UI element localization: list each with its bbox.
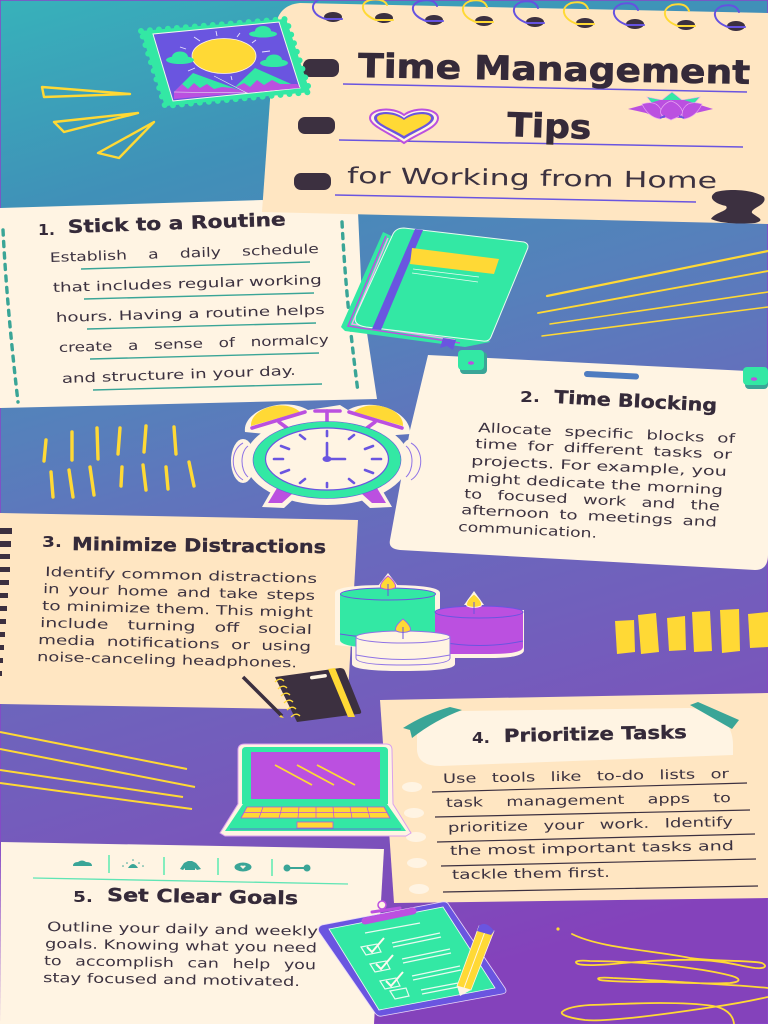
title: Tips: [507, 105, 592, 147]
icon: candles: [335, 573, 524, 671]
icon: black spiral notebook: [275, 668, 361, 722]
icon: shirt: [180, 861, 201, 870]
text: tip 1 body: [50, 242, 329, 387]
decoration: yellow triangle bursts: [42, 87, 154, 158]
icon row: [73, 855, 310, 876]
text: tip 4 body: task management apps to: [446, 791, 731, 811]
text: tip 4 body: prioritize your work. Identify: [448, 815, 733, 836]
washi tape: [403, 702, 739, 738]
icon: lotus flower: [628, 92, 713, 120]
icon: pencil: [243, 677, 284, 718]
text: tip 3 body: [37, 565, 318, 671]
text: tip 2 body: [458, 421, 736, 542]
heading: tip 5: Set Clear Goals: [107, 885, 298, 909]
panel: tip 5 set clear goals: [0, 842, 384, 1024]
icon: cloud: [73, 860, 92, 866]
heading: tip 2: Time Blocking: [554, 387, 718, 417]
text: tip 1 body: Establish a daily schedule: [50, 242, 319, 266]
icon: alarm clock: [231, 404, 423, 508]
text: tip 5 body: goals. Knowing what you need: [45, 937, 317, 956]
text: tip 2 body: to focused work and the: [464, 487, 720, 515]
icon: sun postage stamp: [141, 19, 310, 106]
icon: sunrise: [128, 864, 138, 868]
text: tip 5 body: stay focused and motivated.: [43, 971, 300, 990]
pencil on clipboard: [457, 924, 494, 996]
bullets: [294, 59, 339, 190]
binding rings: [313, 0, 745, 31]
purple candle: [435, 594, 523, 654]
text: tip 4 body: the most important tasks and: [450, 839, 734, 859]
heading: tip 1: [38, 209, 286, 239]
text: tip 5 body: to accomplish can help you: [44, 954, 316, 973]
title: Time Management: [358, 46, 751, 92]
panel: tip 3 minimize distractions: [0, 513, 358, 710]
heading card: [417, 708, 733, 766]
text: tip 2 body: might dedicate the morning: [467, 471, 723, 499]
title: [347, 46, 751, 194]
text: tip 4 body: Use tools like to-do lists or: [443, 767, 730, 787]
heading: tip 3: 3.: [42, 533, 62, 551]
panel: tip 2 time blocking: [390, 350, 768, 570]
text: tip 3 body: to minimize them. This might: [42, 599, 313, 621]
heading: tip 1: 1.: [38, 221, 55, 239]
heading: tip 2: 2.: [520, 388, 540, 406]
text: tip 5 body: [43, 920, 319, 990]
text: tip 2 body: Allocate specific blocks of: [478, 421, 736, 447]
decoration: yellow squiggle: [562, 934, 768, 1024]
heading: tip 4: 4.: [472, 729, 490, 747]
spiral binding: [0, 528, 12, 676]
text: tip 2 body: projects. For example, you: [471, 454, 727, 480]
decoration: yellow paint blocks: [615, 609, 768, 654]
panel: tip 4 prioritize tasks: [380, 693, 768, 903]
text: tip 3 body: Identify common distractions: [45, 565, 318, 587]
text: tip 4 body: tackle them first.: [452, 866, 610, 883]
text: tip 5 body: Outline your daily and weekly: [47, 920, 319, 940]
text: tip 1 body: hours. Having a routine helps: [56, 303, 325, 326]
corner ink blob: [711, 190, 765, 224]
heading: tip 5: 5.: [73, 888, 93, 906]
white candle: [356, 619, 450, 665]
icon: heart: [370, 110, 438, 143]
text: tip 2 body: communication.: [458, 520, 597, 542]
heading: tip 3: Minimize Distractions: [72, 534, 326, 558]
holes: [402, 782, 429, 894]
text: tip 1 body: that includes regular working: [53, 273, 322, 296]
candle halos: [335, 573, 524, 671]
text: tip 3 body: include turning off social: [40, 616, 312, 638]
text: tip 1 body: and structure in your day.: [62, 364, 296, 387]
heading: tip 4: Prioritize Tasks: [504, 722, 687, 747]
text: tip 2 body: time for different tasks or: [475, 437, 733, 463]
heading: tip 5: [73, 885, 298, 909]
panel: title notebook page: [262, 0, 768, 224]
text: tip 3 body: noise-canceling headphones.: [37, 650, 297, 671]
decoration: yellow dashes: [44, 426, 194, 497]
pin left: [458, 350, 487, 374]
decoration: yellow lines upper right: [538, 251, 768, 336]
text: tip 1 body: create a sense of normalcy: [59, 333, 329, 356]
panel: tip 1 stick to a routine: [0, 200, 377, 408]
bookmark ribbon: [440, 338, 456, 350]
text: tip 3 body: media notifications or using: [38, 633, 311, 655]
heading: tip 1: Stick to a Routine: [67, 209, 286, 238]
clock white halo: [231, 404, 423, 508]
decoration: yellow lines lower left: [0, 732, 195, 809]
text: tip 3 body: in your home and take steps: [43, 582, 316, 604]
pin right: [743, 367, 768, 389]
icon: laptop: [220, 744, 411, 836]
heading: tip 2: [520, 387, 718, 417]
text: tip 2 body: afternoon to meetings and: [461, 503, 717, 531]
icon: heart bubble: [234, 862, 252, 872]
title: for Working from Home: [347, 164, 717, 194]
green candle: [340, 576, 436, 648]
icon: green notebook: [341, 228, 528, 350]
icon: clipboard with pencil: [318, 901, 506, 1016]
text: tip 4 body: [443, 767, 734, 883]
icon: dumbbell: [284, 867, 310, 869]
